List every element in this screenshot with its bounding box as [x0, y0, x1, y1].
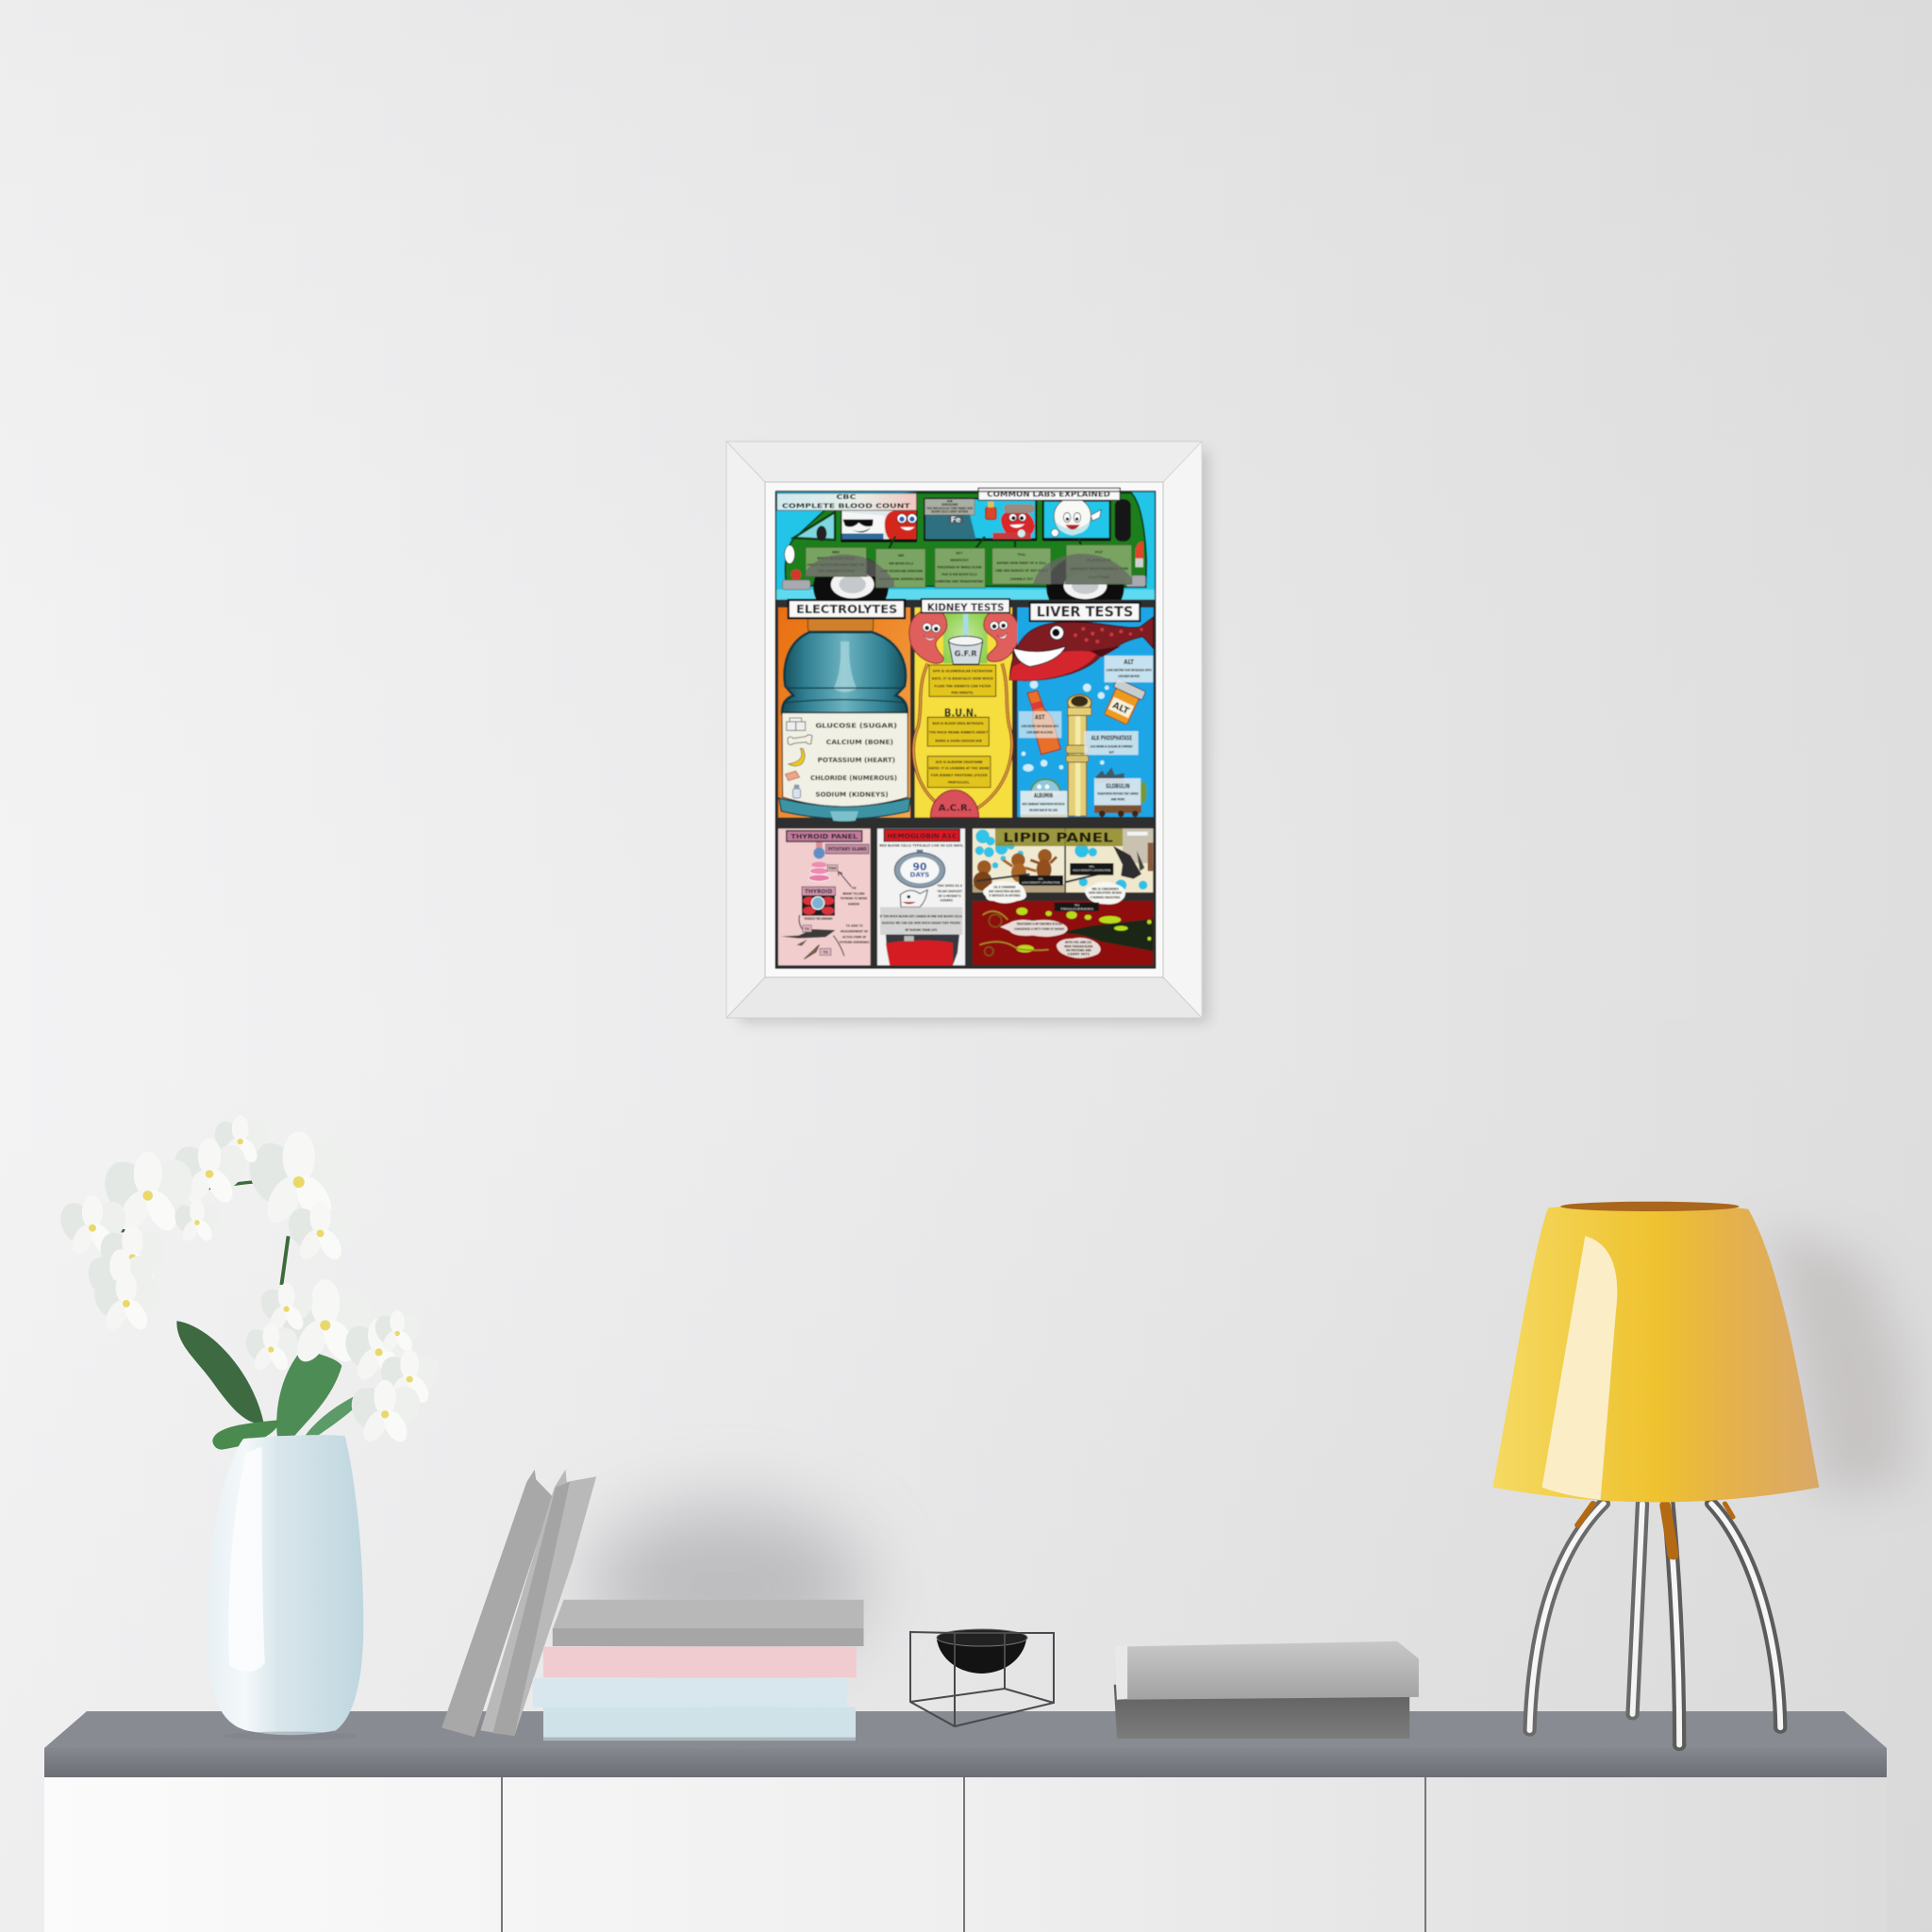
panel: kidney tests	[909, 599, 1019, 818]
HCT box: CARRYING AND TRANSPORTING	[936, 580, 983, 584]
ACR explanation: PARTICLES).	[948, 781, 970, 785]
arrow: TSH	[839, 872, 851, 887]
AST label: LIVER ENZYME THAT INCREASES WITH	[1022, 724, 1058, 728]
HB label: THE MOLECULES THAT MAKE RED	[926, 507, 973, 510]
shelf cabinet	[44, 1711, 1887, 1932]
translucent wheel arches	[806, 554, 1131, 588]
electrolytes heading: ELECTROLYTES	[796, 603, 897, 616]
GFR explanation	[929, 665, 996, 696]
orchid stems	[98, 1182, 324, 1285]
pituitary gland tag	[825, 844, 869, 854]
electrolyte list: CALCIUM (BONE)	[826, 739, 893, 746]
panel: hemoglobin A1C	[877, 828, 965, 965]
ACR bladder	[930, 790, 979, 818]
GFR cup: G.F.R	[955, 649, 977, 658]
percent box: LINE ARE RANGES OF NOT FULLY	[995, 569, 1048, 573]
callout: triglycerides cloud: TRIGLYCERIDES IS ANY SUBSTANCE IN BLOOD	[1016, 923, 1062, 926]
bus body	[785, 493, 1146, 587]
T4 note: MEASUREMENT OF	[841, 929, 868, 933]
globulin label: TRANSPORTER PROTEINS THAT CARRIES	[1097, 791, 1139, 795]
callout: LDL black label: LDL	[1039, 876, 1043, 880]
percent box: SHOWS HOW MANY OF A CELL	[996, 561, 1047, 565]
orchid blooms	[55, 1116, 359, 1333]
BUN explanation	[927, 717, 989, 746]
RBC box: RBC	[898, 554, 905, 558]
callout: LDL cloud: IT DEPOSITS IN ARTERIES	[989, 894, 1021, 898]
callout: lipid cloud	[1057, 938, 1101, 958]
albumin label	[1021, 791, 1067, 814]
WBC box: WHITE BLOOD CELLS	[817, 557, 856, 560]
thyroid tag	[802, 887, 836, 895]
electrolyte list: CHLORIDE (NUMEROUS)	[810, 774, 897, 782]
ACR explanation: ACR IS ALBUMIN CREATININE	[936, 760, 983, 764]
callout: triglycerides cloud: CONSIDERED A FATTY FORM OF ENERGY	[1014, 927, 1065, 931]
icon: bone	[788, 735, 812, 744]
callout: LDL cloud: BAD CHOLESTEROL BECAUSE	[989, 890, 1021, 893]
RBC box	[875, 549, 925, 588]
GFR explanation: GFR IS GLOMERULAR FILTRATION	[933, 669, 992, 673]
orchid leaves	[176, 1321, 373, 1450]
stopwatch	[894, 850, 945, 888]
right kidney character	[984, 610, 1019, 661]
ALT label: LIVER INJURY AND MORE	[1118, 675, 1140, 678]
front wheel	[813, 555, 889, 619]
callout: LDL black label: LOW DENSITY LIPOPROTEIN	[1022, 880, 1059, 884]
monkey trio	[974, 849, 1057, 891]
rear wheel	[1046, 555, 1124, 620]
TSH tag: TSH	[828, 867, 837, 871]
shade highlight	[1542, 1236, 1617, 1500]
TSH note: TSH	[851, 886, 857, 890]
callout: lipid cloud: ON PROTEINS AND	[1066, 949, 1091, 953]
lipid panel heading: LIPID PANEL	[1003, 832, 1114, 846]
T3 tag: T3	[824, 951, 828, 955]
door handles	[890, 536, 1081, 548]
lamp shadow	[1767, 1225, 1908, 1495]
TSH note: THYROID TO WORK	[841, 897, 868, 901]
callout: lipid cloud: CARRY FATS	[1068, 953, 1091, 957]
electrolyte list: POTASSIUM (HEART)	[818, 757, 895, 764]
glucose band	[880, 908, 962, 935]
TSH note: BRAIN TELLING	[842, 891, 865, 895]
ACR explanation: FOR KIDNEY PROTEINS (FILTER	[931, 774, 988, 777]
RBC box: CARRY OXYGEN AND SOMETHING	[880, 570, 923, 574]
PLT box: LARGELY RESPONSIBLE FOR	[1070, 567, 1128, 571]
GFR explanation: RATE. IT IS BASICALLY HOW MUCH	[932, 677, 993, 681]
callout: HDL black label: HDL	[1090, 864, 1095, 868]
ACR explanation: RATIO. IT IS LOOKING AT THE URINE	[929, 767, 990, 771]
HCT box: PERCENTAGE OF WHOLE BLOOD	[937, 566, 982, 570]
HB label	[924, 499, 974, 515]
WBC box: FIGHT INFECTION AND PART OF	[808, 563, 865, 567]
icon: sugar cubes	[787, 718, 806, 730]
HCT box	[935, 548, 985, 588]
lipid scene left	[973, 828, 1064, 892]
BUN explanation: TOO MUCH MEANS KIDNEYS AREN'T	[929, 731, 989, 735]
HCT box: HEMATOCRIT	[950, 558, 969, 562]
orchid and vase	[55, 1116, 864, 1740]
lamp legs	[1529, 1504, 1780, 1745]
ALK phosphatase label: ALP	[1109, 750, 1114, 754]
A1C side note: OF A PATIENT'S	[939, 894, 961, 898]
callout: HDL black label	[1070, 863, 1113, 875]
sports drink bottle	[782, 632, 908, 713]
callout: HDL cloud: IT REMOVES CHOLESTEROL	[1091, 895, 1121, 899]
vase	[207, 1435, 363, 1740]
GFR explanation: PER MINUTE.	[951, 691, 974, 695]
A1C side note: THIS GIVES US A	[937, 884, 962, 888]
left kidney character	[909, 609, 947, 663]
intro line: RED BLOOD CELLS TYPICALLY LIVE 90-120 DAYS.	[879, 844, 964, 848]
A1C side note	[937, 884, 963, 903]
TSH note	[841, 886, 868, 907]
panel: electrolytes	[778, 600, 910, 822]
A1C side note: SUGARS	[941, 899, 953, 903]
callout: triglycerides black label: TRG	[1074, 903, 1079, 907]
panel: thyroid: PRODUCES TWO HORMONES	[805, 917, 833, 921]
AST label: LIVER INJURY OR ALCOHOL	[1026, 730, 1054, 734]
bus window: iron and red cell with blood bag	[924, 498, 1037, 541]
AST label: AST	[1035, 713, 1045, 722]
liver tests heading: LIVER TESTS	[1037, 604, 1133, 620]
callout: triglycerides black label	[1055, 903, 1099, 911]
CBC heading: CBC	[836, 492, 856, 501]
callout: HDL black label: HIGH DENSITY LIPOPROTEIN	[1073, 868, 1110, 872]
AST sauce bottle	[1024, 689, 1060, 755]
thyroid tag: THYROID	[805, 889, 832, 895]
thyroid panel heading	[787, 831, 862, 841]
percent box: CAPABLE YET	[1010, 577, 1034, 581]
WBC box: WBC	[832, 550, 841, 554]
lipid lower panel	[973, 901, 1153, 965]
ACR bladder: A.C.R.	[939, 803, 972, 813]
albumin label: MOST ABUNDANT TRANSPORTER PROTEIN IN	[1022, 802, 1065, 806]
stacked books	[533, 1600, 864, 1740]
bus window: pill and red cell	[841, 509, 917, 542]
bottle base	[779, 798, 910, 819]
icon: salt shaker	[792, 785, 801, 798]
middle row of panels	[778, 599, 1154, 822]
PLT box: CLOTTING	[1089, 575, 1109, 579]
HB label: BLOOD CELLS CARRY OXYGEN	[931, 509, 968, 513]
icon: chloride chunk	[785, 771, 800, 781]
bottle cap	[808, 619, 874, 633]
water stream	[963, 614, 968, 638]
T4 note: ACTIVE FORM OF	[842, 935, 866, 939]
albumin label: THE BODY MADE BY THE LIVER	[1029, 808, 1058, 812]
white sugar shark character	[900, 890, 927, 908]
ALT pill bottle	[1101, 678, 1146, 726]
globulin label	[1094, 778, 1141, 806]
right book stack	[1114, 1641, 1419, 1739]
kidney tests heading: KIDNEY TESTS	[927, 601, 1005, 613]
T4 tag: T4	[805, 927, 809, 931]
lamp shade	[1492, 1202, 1819, 1502]
common labs heading: COMMON LABS EXPLAINED	[987, 490, 1110, 499]
CBC heading	[777, 492, 917, 510]
percent box: %	[1017, 553, 1027, 557]
stopwatch: 90	[913, 860, 926, 873]
thyroid gland	[802, 895, 835, 916]
callout: triglycerides black label: TRIGLYCERIDES	[1060, 907, 1094, 910]
hemoglobin heading: HEMOGLOBIN A1C	[887, 831, 957, 840]
callout: lipid cloud: MOVE THROUGH BLOOD	[1064, 944, 1092, 948]
callout: lipid cloud: BOTH HDL AND LDL	[1065, 941, 1092, 944]
poster: common labs explained	[775, 488, 1155, 968]
BUN explanation: BUN IS BLOOD UREA NITROGEN.	[932, 722, 984, 725]
urinary tube	[913, 663, 1012, 808]
PLT box	[1066, 545, 1132, 584]
WBC box	[806, 547, 867, 576]
ALK phosphatase label	[1084, 731, 1139, 755]
HB label: HB	[947, 499, 953, 503]
thyroid panel heading: THYROID PANEL	[791, 832, 858, 841]
TSH tag	[827, 865, 838, 871]
electrolyte list	[810, 721, 897, 798]
callout: LDL cloud	[983, 881, 1026, 903]
ALT label	[1105, 656, 1153, 682]
GFR cup	[949, 636, 983, 664]
rear window	[1115, 499, 1131, 541]
callout: HDL cloud: HDL IS CONSIDERED	[1091, 887, 1119, 891]
callout: triglycerides cloud	[1000, 920, 1068, 937]
icon: banana	[789, 748, 805, 766]
electrolyte list: SODIUM (KIDNEYS)	[815, 791, 889, 798]
T4 note: T4 AND T3	[846, 924, 863, 927]
brass pipe	[1066, 694, 1091, 816]
albumin label: ALBUMIN	[1034, 791, 1053, 799]
ALK phosphatase label: ALSO KNOWN AS ALKALINE OR COMMONLY	[1091, 744, 1133, 748]
PLT box: PLT	[1095, 550, 1104, 554]
electrolytes heading	[789, 600, 905, 618]
panel: lipid	[973, 828, 1153, 965]
globulin label: GLOBULIN	[1106, 782, 1130, 791]
hemoglobin heading	[884, 829, 959, 841]
glucose band: GLUCOSE WE CAN SEE HOW MUCH SUGAR THEY PICKED	[882, 921, 960, 924]
T4 and T3 creatures	[781, 915, 844, 959]
ALK phosphatase label: ALK PHOSPHATASE	[1091, 734, 1132, 742]
red bag	[886, 935, 959, 965]
panel: liver tests	[1009, 603, 1154, 817]
callout: HDL cloud	[1085, 882, 1125, 905]
lipid panel heading	[995, 828, 1123, 846]
AST label	[1019, 711, 1061, 738]
HB label: HEMOGLOBIN	[941, 503, 958, 507]
BUN heading: B.U.N.	[944, 707, 977, 720]
electrolyte list: GLUCOSE (SUGAR)	[815, 721, 897, 729]
WBC box: THE IMMUNE SYSTEM	[817, 570, 856, 574]
T4 note: THYROID HORMONES	[840, 941, 870, 944]
leaning books	[441, 1470, 596, 1737]
coral reef	[1096, 767, 1124, 783]
common labs heading	[978, 488, 1120, 500]
percent box	[992, 548, 1051, 584]
CBC heading: COMPLETE BLOOD COUNT	[782, 501, 911, 509]
whale shark	[1009, 617, 1154, 681]
GFR explanation: FLUID THE KIDNEYS CAN FILTER	[934, 684, 991, 688]
callout: LDL black label	[1019, 875, 1063, 886]
pituitary and TSH cake	[808, 841, 830, 881]
RBC box: RED BLOOD CELLS	[890, 562, 914, 566]
bottom row of panels	[778, 828, 1153, 965]
ALT label: ALT	[1124, 658, 1134, 666]
bus window: platelet character	[1042, 498, 1111, 541]
right side: books and lamp	[1114, 1202, 1908, 1745]
T4 note	[840, 924, 870, 944]
HCT box: HCT	[956, 552, 963, 556]
TSH note: HARDER	[848, 903, 859, 907]
wall shadow behind left books	[585, 1505, 868, 1665]
desk lamp	[1492, 1202, 1819, 1745]
stopwatch: DAYS	[910, 872, 929, 879]
T3 tag	[820, 948, 831, 956]
bottle label	[782, 713, 908, 807]
bus front window	[793, 512, 835, 540]
panel: CBC bus	[776, 488, 1155, 620]
T4 tag	[803, 925, 811, 932]
lipid scene right	[1066, 828, 1153, 892]
BUN explanation: DOING A GOOD ENOUGH JOB	[935, 740, 982, 743]
albumin character	[1021, 779, 1068, 817]
ACR explanation	[927, 757, 991, 788]
callout: LDL cloud: LDL IS CONSIDERED	[993, 886, 1016, 890]
spear	[976, 871, 1111, 882]
globulin label: AND MORE	[1111, 797, 1125, 801]
pituitary gland tag: PITUITARY GLAND	[828, 847, 867, 853]
globulin cart	[1094, 781, 1147, 817]
panel: thyroid	[778, 828, 871, 965]
A1C side note: *90 DAY SNAPSHOT	[937, 890, 963, 893]
HCT box: THAT IS RED BLOOD CELLS	[941, 573, 977, 576]
glucose band: IF TOO MUCH BLOOD GOT LOADED IN ONE RED BLOOD CELLS	[880, 914, 962, 918]
callout: HDL cloud: GOOD CHOLESTEROL BECAUSE	[1089, 891, 1123, 895]
bus window: iron and red cell with blood bag: Fe	[951, 514, 961, 524]
ALT pill bottle: ALT	[1110, 700, 1131, 717]
lower orchid blooms	[241, 1279, 445, 1445]
ALT label: LIVER ENZYME THAT INCREASES WITH	[1106, 669, 1152, 673]
PLT box: PLATELETS	[1087, 558, 1111, 562]
glucose band: UP DURING THEIR LIFE	[905, 928, 938, 932]
bubbles	[1022, 680, 1109, 772]
white picture frame	[726, 441, 1202, 1018]
bus lights and bumpers	[782, 541, 1146, 590]
frame shadow on wall	[741, 451, 1208, 1023]
RBC box: CALLED IRON (HEMOGLOBIN)	[879, 577, 924, 581]
wire cube with black bowl	[910, 1629, 1054, 1726]
